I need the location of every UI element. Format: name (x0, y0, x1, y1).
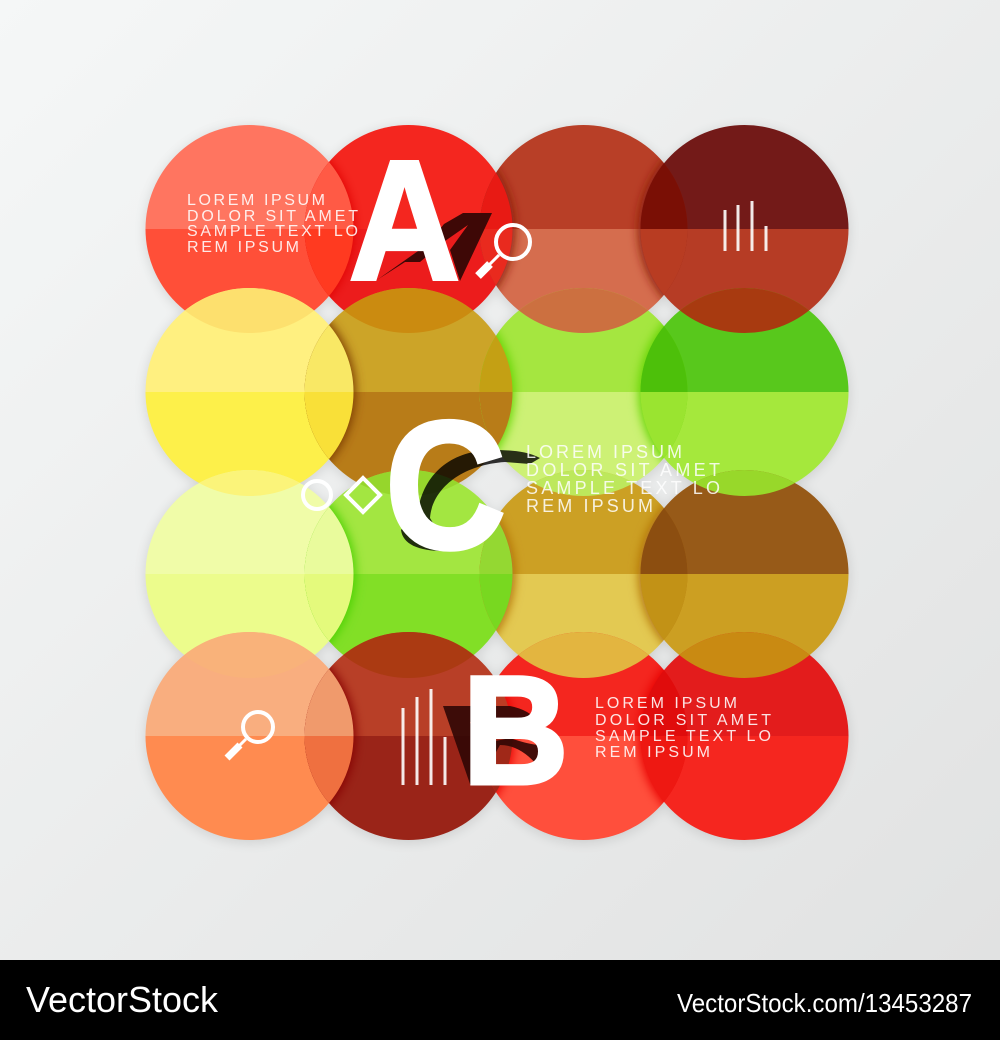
row 4 circles: orange and red tones (144, 630, 850, 842)
letter C with shadow: C (385, 383, 506, 587)
footer image id: VectorStock.com/13453287 (677, 988, 972, 1018)
circle grid drop shadow (146, 127, 848, 842)
text block: top left: LOREM IPSUM (187, 192, 325, 209)
text block: center: REM IPSUM (526, 496, 653, 516)
text block: center: SAMPLE TEXT LO (526, 478, 720, 498)
footer bar (0, 960, 1000, 1040)
text block: bottom right: DOLOR SIT AMET (595, 712, 771, 729)
icon: diamond (346, 478, 380, 512)
overlaps between rows (146, 288, 848, 840)
row 1 circles: red tones (146, 125, 848, 310)
icon: magnifier top (478, 225, 530, 276)
text block: bottom right: REM IPSUM (595, 744, 710, 761)
text block: center: LOREM IPSUM (526, 442, 682, 462)
text block: center (526, 442, 720, 516)
letter B with shadow: B (463, 645, 568, 816)
row 3 circles: lime and gold tones (146, 470, 848, 655)
text block: bottom right (595, 695, 771, 761)
letter A with shadow: A (349, 126, 460, 316)
footer logo: VectorStock (26, 979, 219, 1020)
icon: bars bottom (403, 689, 445, 785)
row 2 circles: yellow and green tones (144, 286, 850, 498)
text block: bottom right: LOREM IPSUM (595, 695, 737, 712)
text block: top left: REM IPSUM (187, 239, 299, 256)
text block: bottom right: SAMPLE TEXT LO (595, 728, 771, 745)
icon: magnifier bottom left (227, 712, 273, 758)
text block: top left (187, 192, 358, 256)
text block: top left: SAMPLE TEXT LO (187, 223, 358, 240)
icon: bars top right (725, 201, 766, 251)
icon: ring (303, 481, 331, 509)
text block: top left: DOLOR SIT AMET (187, 208, 358, 225)
text block: center: DOLOR SIT AMET (526, 460, 720, 480)
